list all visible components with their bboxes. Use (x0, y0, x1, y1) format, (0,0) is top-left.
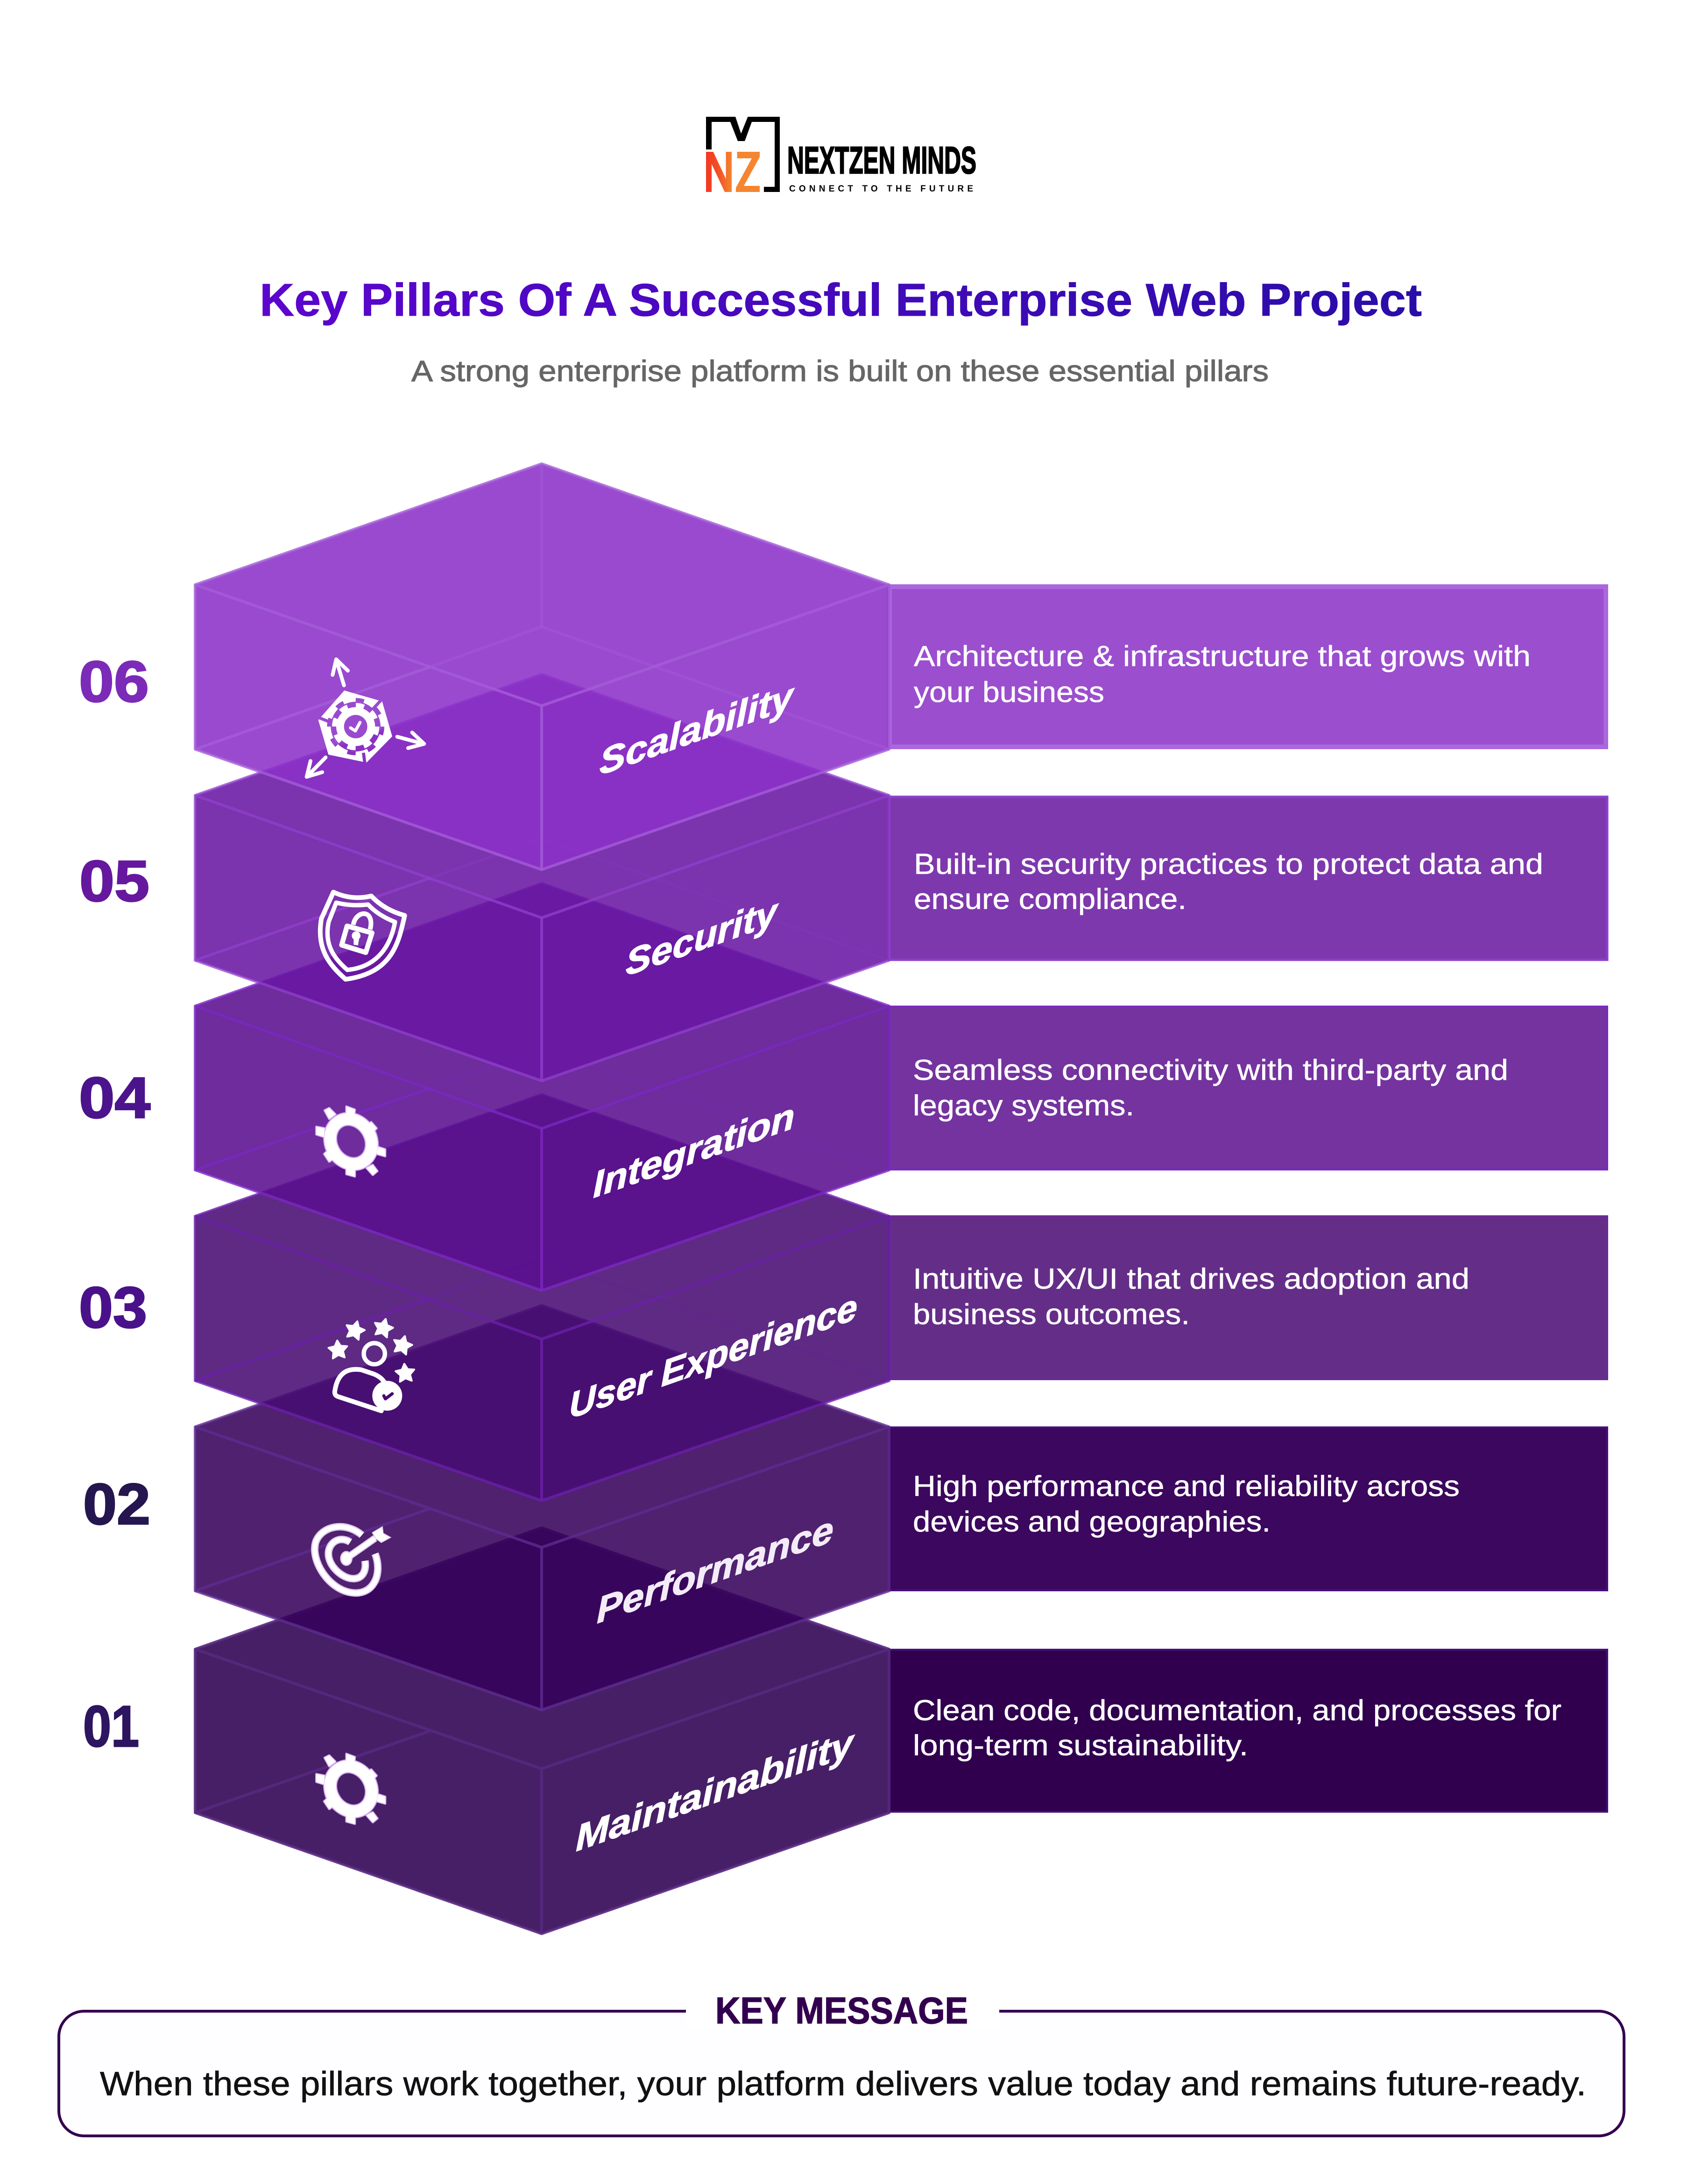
key message text: When these pillars work together, your platform delivers value today and remains future-ready. (100, 2065, 1586, 2103)
logo letter N (706, 152, 732, 192)
subtitle: A strong enterprise platform is built on these essential pillars (411, 355, 1269, 388)
number 05: 05 (79, 849, 149, 914)
icon: gear (316, 1106, 385, 1177)
panel: 02 description (889, 1427, 1607, 1590)
pillar 06: Scalability (195, 464, 889, 870)
panel: 03 description (889, 1216, 1607, 1379)
panel: 06 description: your business (914, 676, 1104, 709)
title: Key Pillars Of A Successful Enterprise Web Project (260, 274, 1422, 326)
panel: 03 description: business outcomes. (913, 1298, 1190, 1331)
panel: 06 description: Architecture & infrastructure that grows with (914, 640, 1531, 673)
panel: 02 description: devices and geographies. (913, 1506, 1271, 1538)
key message heading: KEY MESSAGE (715, 1990, 968, 2031)
logo tagline: CONNECT TO THE FUTURE (789, 184, 973, 194)
logo letter Z (736, 152, 760, 192)
label: Integration: Integration (593, 1095, 795, 1206)
number 02: 02 (83, 1472, 150, 1537)
icon: gear (316, 1754, 385, 1824)
panel: 05 description: Built-in security practices to protect data and (914, 848, 1543, 880)
label: Performance: Performance (597, 1508, 833, 1631)
logo mark frame (706, 117, 780, 192)
label: Maintainability: Maintainability (576, 1721, 855, 1859)
label: Scalability: Scalability (600, 674, 795, 783)
callout: key message (59, 1990, 1624, 2136)
label: User Experience: User Experience (569, 1286, 857, 1427)
panel: 01 description (889, 1650, 1607, 1812)
icon: target with arrow (315, 1527, 390, 1593)
icon: user with stars (328, 1317, 415, 1411)
panel: 04 description: legacy systems. (913, 1090, 1134, 1122)
pillar 01: Maintainability (195, 1528, 889, 1934)
pillar 02: Performance (195, 1305, 889, 1710)
panel: 05 description: ensure compliance. (914, 883, 1187, 915)
label: Security: Security (626, 890, 779, 984)
icon: shield with lock (320, 892, 405, 979)
number 04: 04 (79, 1066, 150, 1130)
pillar 04: Integration (195, 884, 889, 1291)
panel: 04 description (889, 1007, 1607, 1170)
panel: 01 description: long-term sustainability. (913, 1730, 1248, 1762)
panel: 01 description: Clean code, documentation, and processes for (913, 1695, 1561, 1727)
panel: 06 description (890, 587, 1606, 747)
panel: 04 description: Seamless connectivity with third-party and (913, 1054, 1508, 1086)
panel: 03 description: Intuitive UX/UI that drives adoption and (913, 1263, 1469, 1295)
pillar 05: Security (195, 674, 889, 1081)
pillar 03: User Experience (195, 1095, 889, 1501)
logo wordmark: NEXTZEN MINDS (787, 139, 976, 182)
number 03: 03 (79, 1276, 147, 1340)
panel: 02 description: High performance and reliability across (913, 1470, 1460, 1503)
panel: 05 description (889, 797, 1607, 960)
icon: scalable gear with arrows (304, 658, 426, 779)
number 01: 01 (83, 1695, 139, 1759)
number 06: 06 (79, 650, 149, 714)
logo (706, 117, 976, 194)
